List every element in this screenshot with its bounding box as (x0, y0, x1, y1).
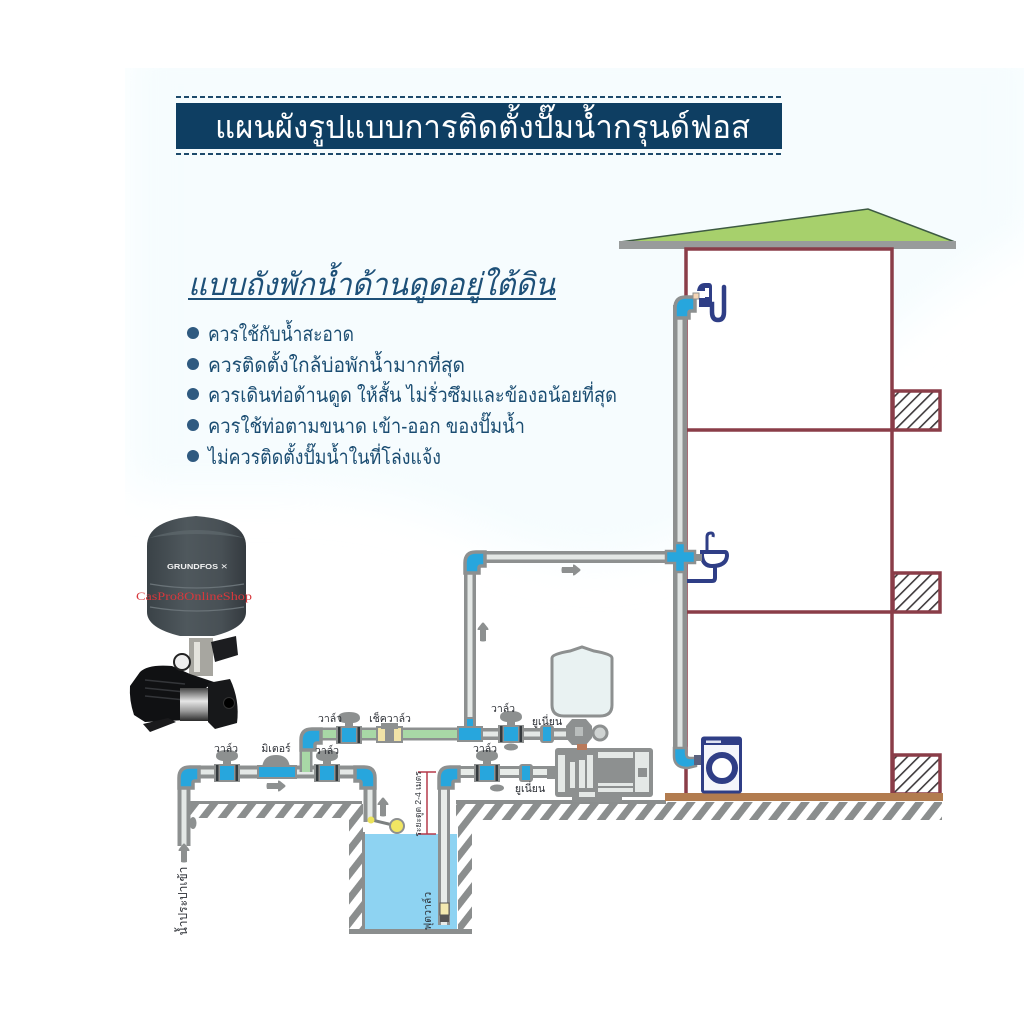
diagram labels: วาล์ว (491, 702, 515, 715)
pipework (184, 305, 680, 925)
diagram labels: ระยะดูด 2-4 เมตร (413, 771, 424, 837)
main supply (184, 772, 370, 846)
suction height marker (418, 772, 436, 834)
diagram labels: วาล์ว (214, 742, 238, 755)
diagram labels: วาล์ว (315, 744, 339, 757)
floor slab (665, 793, 943, 801)
title: แผนผังรูปแบบการติดตั้งปั๊มน้ำกรุนด์ฟอส (215, 104, 750, 147)
roof (620, 209, 955, 242)
fixture: wash basin (687, 533, 727, 581)
bottom elbow (674, 748, 696, 768)
bullet list (187, 320, 617, 469)
float valve (368, 816, 404, 833)
title banner (176, 97, 783, 154)
diagram labels: วาล์ว (473, 742, 497, 755)
top margin mask (0, 0, 1024, 68)
fixture: washing machine (694, 738, 741, 792)
background wash (125, 40, 1024, 560)
subheading: แบบถังพักน้ำด้านดูดอยู่ใต้ดิน (188, 262, 556, 304)
diagram labels: มิเตอร์ (261, 742, 291, 755)
riser to house (470, 557, 680, 734)
flow arrows (178, 564, 580, 862)
walls and floors (686, 249, 892, 795)
bullet list: ไม่ควรติดตั้งปั๊มน้ำในที่โล่งแจ้ง (206, 442, 441, 469)
diagram labels: ยูเนี่ยน (515, 781, 545, 795)
watermark: CasPro8OnlineShop (136, 591, 252, 603)
foot valve (440, 903, 449, 922)
fixture: wall tap (697, 283, 724, 320)
cross fitting (666, 543, 695, 572)
booster pump diagram (547, 647, 653, 802)
top elbow (675, 297, 695, 318)
left margin mask (0, 0, 125, 1024)
fittings: valves, meter, unions, elbows (179, 293, 699, 788)
bullet list: ควรเดินท่อด้านดูด ให้สั้น ไม่รั่วซึมและข้องอน้อยที่สุด (208, 381, 617, 408)
diagram labels: ฟุตวาล์ว (421, 892, 434, 930)
ground and pit hatching (190, 793, 943, 934)
diagram labels: ยูเนี่ยน (532, 714, 562, 728)
brand label: GRUNDFOS ✕ (167, 562, 228, 571)
water tank pit (365, 834, 457, 929)
suction (444, 772, 556, 925)
diagram labels: เช็ควาล์ว (369, 711, 411, 725)
diagram labels: น้ำประปาเข้า (174, 867, 190, 935)
green bypass (306, 734, 470, 772)
bullet list: ควรติดตั้งใกล้บ่อพักน้ำมากที่สุด (208, 351, 465, 378)
diagram labels (174, 702, 562, 935)
product photo: pressure tank booster pump (130, 516, 252, 732)
balcony hatches (893, 391, 940, 430)
diagram labels: วาล์ว (318, 712, 342, 725)
bullet list: ควรใช้กับน้ำสะอาด (208, 320, 354, 346)
vertical house riser (673, 305, 687, 755)
bullet list: ควรใช้ท่อตามขนาด เข้า-ออก ของปั๊มน้ำ (208, 411, 525, 438)
expansion tank (552, 647, 612, 716)
building (619, 209, 956, 795)
